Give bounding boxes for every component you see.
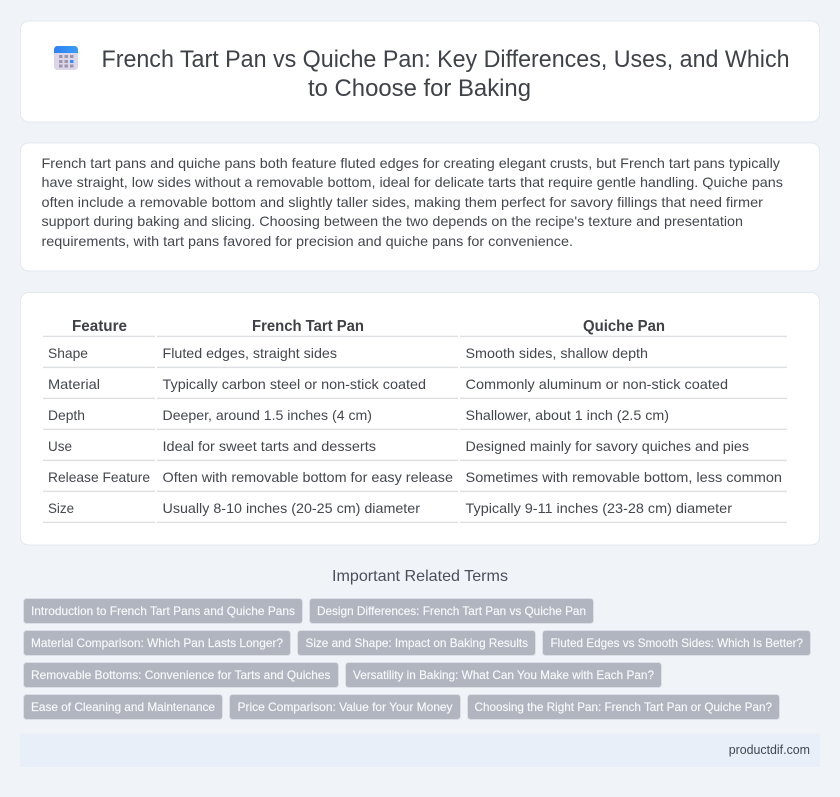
tag: Price Comparison: Value for Your Money (238, 700, 452, 714)
tag (24, 662, 338, 688)
intro paragraph: requirements, with tart pans favored for precision and quiche pans for convenience. (42, 233, 573, 249)
tag: Fluted Edges vs Smooth Sides: Which Is Better? (550, 636, 803, 650)
tag (230, 694, 460, 720)
title: French Tart Pan vs Quiche Pan: Key Differences, Uses, and Which (102, 46, 790, 73)
intro paragraph: often include a removable bottom and slightly taller sides, making them perfect for savory fillings that need firmer (42, 194, 763, 210)
tag: Ease of Cleaning and Maintenance (31, 700, 215, 714)
tag (24, 694, 222, 720)
tag (310, 598, 594, 624)
title (102, 46, 790, 102)
heading: important related terms: Important Related Terms (332, 568, 508, 585)
row: release feature: Sometimes with removable bottom, less common (466, 469, 782, 485)
row: use: Designed mainly for savory quiches and pies (466, 438, 749, 454)
title: to Choose for Baking (308, 75, 531, 102)
tag (346, 662, 662, 688)
row: depth: Depth (48, 407, 85, 423)
footer: productdif.com (729, 742, 810, 757)
row: shape: Smooth sides, shallow depth (466, 345, 648, 361)
related term tags (24, 598, 810, 720)
row: material: Material (48, 376, 100, 392)
intro paragraph: support during baking and slicing. Choosing between the two depends on the recipe's texture and presentation (42, 213, 743, 229)
row: size (48, 500, 732, 516)
tag: Introduction to French Tart Pans and Quiche Pans (31, 604, 295, 618)
row: use: Ideal for sweet tarts and desserts (162, 438, 376, 454)
tag (298, 630, 536, 656)
row: material (48, 376, 728, 392)
panel: comparison table (20, 292, 820, 545)
tag: Versatility in Baking: What Can You Make with Each Pan? (353, 668, 654, 682)
row: shape (48, 345, 648, 361)
tag: Size and Shape: Impact on Baking Results (306, 636, 528, 650)
table header: Feature (72, 318, 127, 335)
intro paragraph: have straight, low sides without a removable bottom, ideal for delicate tarts that require gentle handling. Quiche pans (42, 174, 783, 190)
table header: French Tart Pan (252, 318, 364, 335)
row: release feature: Release Feature (48, 469, 150, 485)
row: use (48, 438, 749, 454)
tag (468, 694, 780, 720)
row: size: Size (48, 500, 74, 516)
table header: Quiche Pan (583, 318, 665, 335)
row: depth: Shallower, about 1 inch (2.5 cm) (466, 407, 669, 423)
tag: Material Comparison: Which Pan Lasts Longer? (31, 636, 283, 650)
tag (24, 598, 302, 624)
row: size: Usually 8-10 inches (20-25 cm) diameter (162, 500, 420, 516)
row: shape: Shape (48, 345, 88, 361)
intro paragraph: French tart pans and quiche pans both feature fluted edges for creating elegant crusts, but French tart pans typically (42, 155, 780, 171)
table header (72, 318, 665, 335)
row: use: Use (48, 438, 72, 454)
panel: introduction (20, 143, 820, 271)
header panel (20, 21, 820, 122)
row: release feature: Often with removable bottom for easy release (162, 469, 453, 485)
row: material: Typically carbon steel or non-stick coated (162, 376, 426, 392)
tag: Design Differences: French Tart Pan vs Quiche Pan (317, 604, 586, 618)
tag: Choosing the Right Pan: French Tart Pan or Quiche Pan? (474, 700, 772, 714)
footer (20, 734, 820, 767)
row: release feature (48, 469, 782, 485)
row: shape: Fluted edges, straight sides (162, 345, 337, 361)
tag (542, 630, 810, 656)
row: depth: Deeper, around 1.5 inches (4 cm) (162, 407, 372, 423)
icon: calendar (54, 46, 78, 70)
row: size: Typically 9-11 inches (23-28 cm) diameter (466, 500, 732, 516)
tag: Removable Bottoms: Convenience for Tarts and Quiches (31, 668, 330, 682)
row: depth (48, 407, 669, 423)
intro paragraph (42, 155, 783, 249)
row: material: Commonly aluminum or non-stick coated (466, 376, 728, 392)
tag (24, 630, 290, 656)
